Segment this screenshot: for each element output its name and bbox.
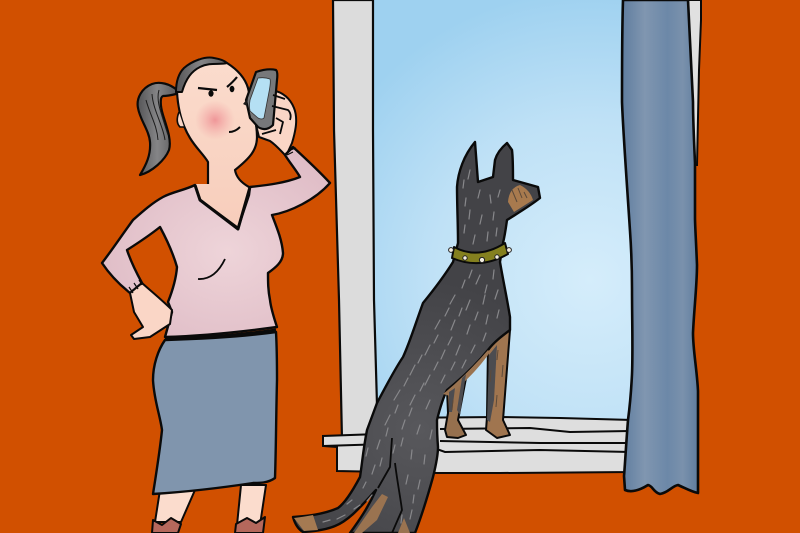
hand on phone (256, 90, 296, 156)
fingers (262, 95, 291, 134)
dog collar (449, 243, 511, 263)
face outline (177, 63, 257, 187)
dog near leg dark shading (487, 345, 497, 422)
curtain (622, 0, 698, 494)
hand on hip (130, 283, 172, 339)
cuff marks (129, 148, 296, 293)
sweater (102, 147, 330, 337)
dog near foreleg (486, 330, 510, 438)
eyebrows (198, 77, 237, 90)
right window frame (688, 0, 701, 165)
dog far foreleg (445, 373, 467, 438)
hair top (176, 58, 227, 92)
dog (293, 142, 540, 533)
dog chest tan shading (443, 350, 490, 396)
dog far leg dark shading (449, 374, 466, 415)
bust line (198, 259, 225, 279)
dog tail tip tan (294, 515, 318, 531)
eyes (208, 86, 234, 97)
skirt (153, 332, 277, 494)
hem line (165, 330, 276, 339)
dog body, head and tail (293, 142, 540, 533)
ponytail (138, 83, 177, 175)
dog hind leg tan patches (354, 494, 410, 533)
mouth (229, 127, 240, 132)
neck and face skin (177, 58, 257, 230)
boots (152, 517, 265, 533)
dog fur strokes (323, 170, 500, 523)
dog inner lines (378, 438, 402, 533)
blush (195, 100, 235, 140)
phone (243, 69, 277, 129)
dog muzzle tan (508, 185, 533, 212)
woman (102, 58, 330, 533)
left window frame (333, 0, 377, 440)
window (323, 0, 701, 473)
neckline (195, 185, 250, 229)
window glass with sky (372, 0, 634, 422)
ear (177, 112, 184, 127)
legs (155, 485, 266, 525)
window sill (323, 417, 632, 473)
dog tan fur strokes (452, 188, 527, 410)
